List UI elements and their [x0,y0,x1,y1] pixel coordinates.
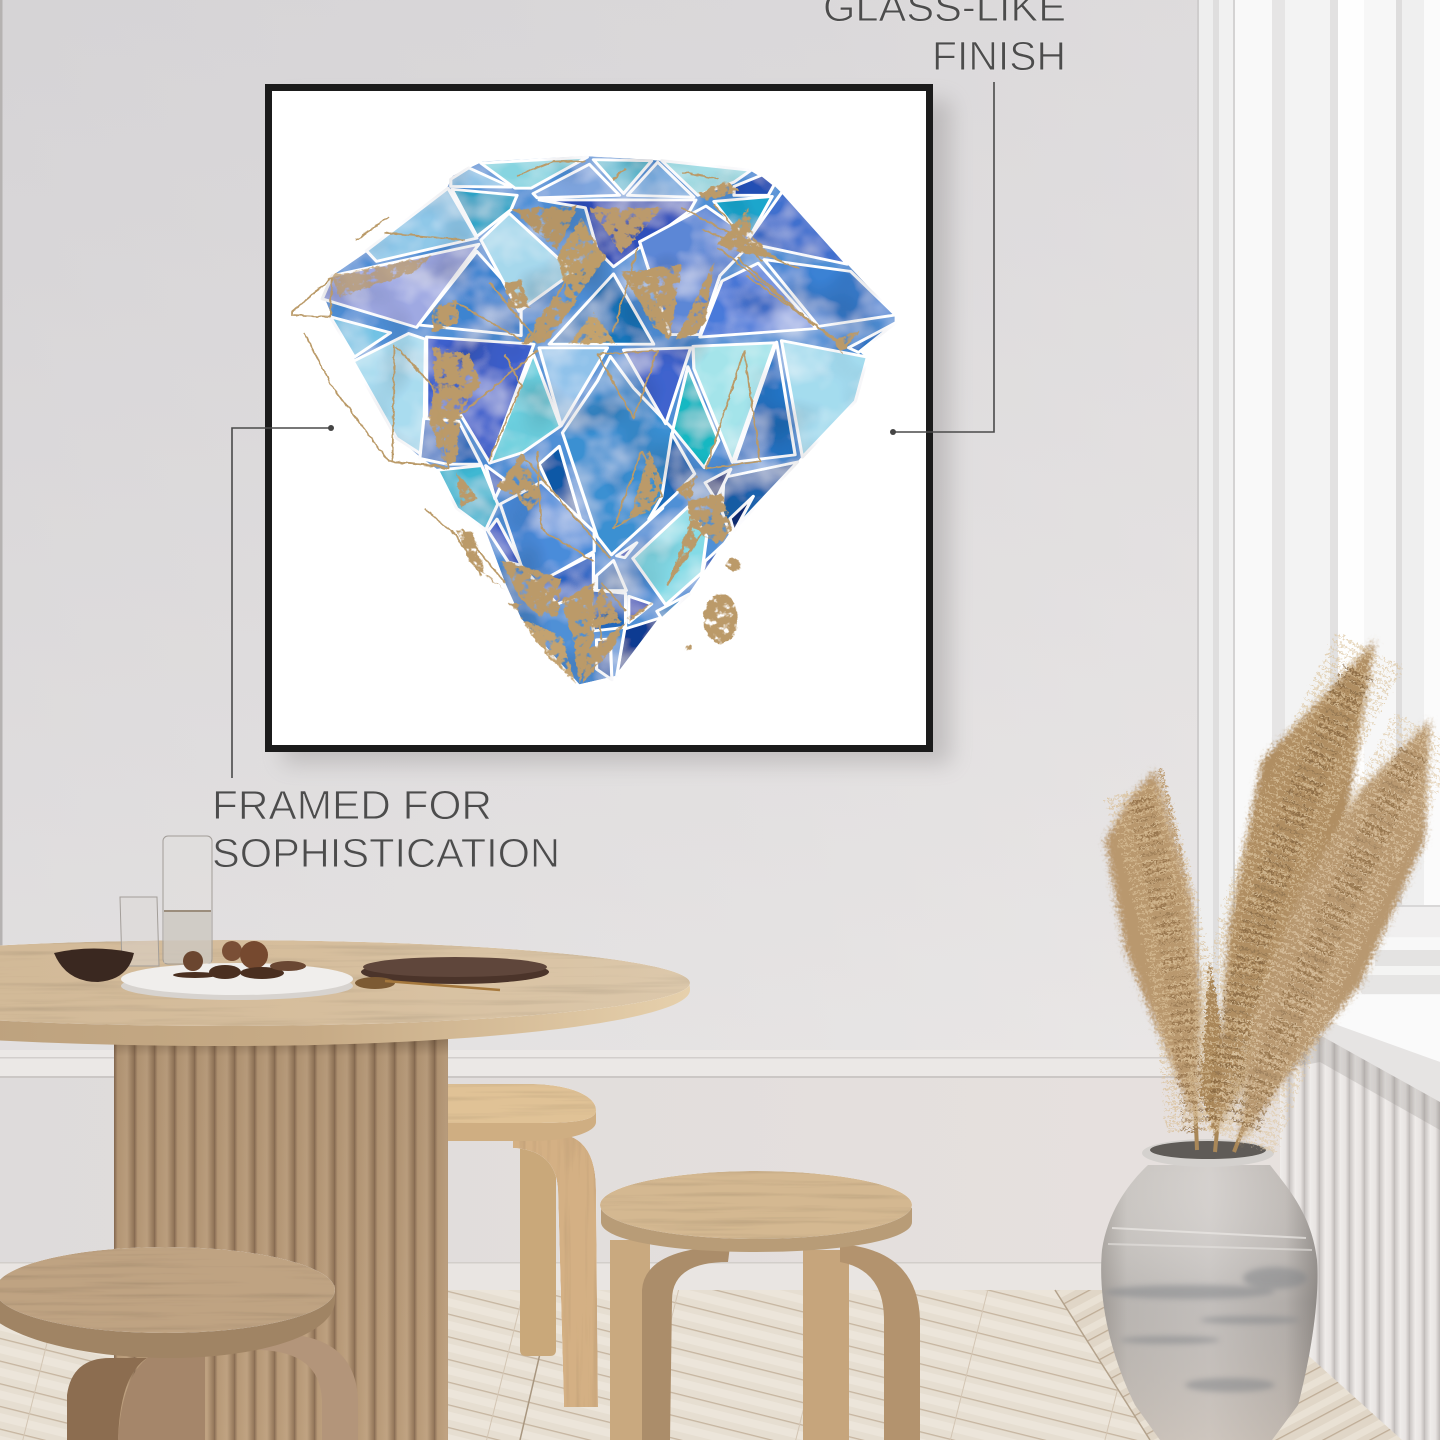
diamond illustration [292,156,896,684]
label text: framed for sophistication: FRAMED FOR [212,782,492,828]
dark wooden bowl [54,948,134,982]
pampas grass stems [1195,1100,1250,1152]
cocoa fruits on board [173,941,306,979]
dining table top [0,940,690,1046]
blue watercolor facets [322,156,896,684]
wooden floor [0,1290,1420,1440]
baseboard [0,1262,1290,1292]
gold spoon [355,977,500,990]
framed artwork [265,84,933,752]
right stool legs [610,1240,920,1440]
windowsill [1318,995,1440,1102]
pampas plume: centre [1215,640,1375,1130]
vase rim [1142,1139,1274,1167]
callout: framed for sophistication [212,425,560,876]
pampas plume: small middle [1200,960,1228,1135]
vase grey weathering [1105,1267,1307,1392]
framed artwork shadow [283,100,951,764]
pampas plume: right [1238,720,1430,1145]
right stool [600,1171,920,1440]
front stool legs [67,1334,358,1440]
leader line: framed for sophistication [232,425,334,778]
window frame [1197,0,1440,1060]
back stool [448,1084,598,1407]
drinking glass [120,897,159,966]
chair rail moulding [0,1050,1290,1078]
gold leaf patches [332,181,859,684]
leader line: glass-like finish [890,82,994,435]
radiator [1280,1030,1440,1440]
right stool seat [600,1171,912,1252]
stack of books on windowsill [1353,938,1440,994]
callout: glass-like finish [823,0,1077,435]
dark wooden plate [361,957,549,984]
front stool [0,1247,358,1440]
fluted table pedestal [114,1036,448,1440]
label text: framed for sophistication: SOPHISTICATION [212,830,560,876]
glass carafe [163,836,212,964]
ceramic vase [1101,1139,1318,1440]
label text: glass-like finish: FINISH [932,33,1066,79]
pampas plume: left [1105,770,1202,1130]
front stool seat [0,1247,335,1358]
gold scribble lines [292,161,847,640]
marble board [121,963,353,1000]
